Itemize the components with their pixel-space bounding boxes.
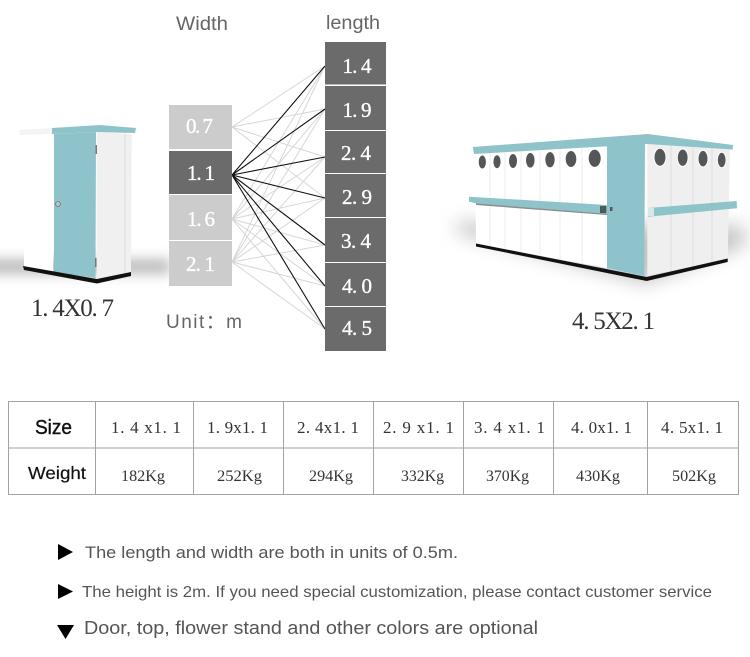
- note 3: Door, top, flower stand and other colors are optional: [84, 618, 538, 638]
- row: weight: 294Kg: [309, 468, 353, 485]
- row: weight: [28, 463, 716, 485]
- row: size: 3. 4 x1. 1: [474, 418, 545, 437]
- row: size: Size: [35, 417, 72, 439]
- small shed illustration: [0, 125, 170, 284]
- row: size: 1. 9x1. 1: [207, 418, 268, 437]
- length column: 1. 9: [342, 98, 372, 122]
- note 2: The height is 2m. If you need special customization, please contact customer service: [82, 584, 712, 601]
- unit note: Unit：m: [166, 312, 242, 333]
- front windows: [479, 150, 601, 168]
- size and weight table: [8, 402, 738, 494]
- row: weight: 370Kg: [486, 468, 529, 485]
- row: size: 2. 4x1. 1: [297, 418, 359, 437]
- width column: 1. 6: [187, 207, 215, 231]
- length column: 3. 4: [341, 229, 372, 253]
- heading: width: Width: [176, 14, 228, 35]
- small shed caption: 1. 4X0. 7: [31, 295, 114, 322]
- row: size: 1. 4 x1. 1: [111, 418, 181, 437]
- connector lines: inactive widths: [232, 66, 325, 329]
- row: weight: 502Kg: [672, 468, 716, 485]
- row: weight: 332Kg: [401, 468, 444, 485]
- row: size: 4. 0x1. 1: [571, 418, 632, 437]
- width column: [169, 105, 232, 286]
- row: weight: 430Kg: [576, 468, 620, 485]
- row: weight: 252Kg: [217, 468, 262, 485]
- length column: 2. 4: [341, 141, 372, 165]
- row: size: 2. 9 x1. 1: [383, 418, 454, 437]
- row: weight: Weight: [28, 463, 86, 483]
- length column: 1. 4: [342, 54, 372, 78]
- large shed caption: 4. 5X2. 1: [572, 308, 655, 335]
- row: weight: 182Kg: [121, 468, 165, 485]
- length column: 4. 0: [342, 274, 372, 298]
- connector lines: width 1.1: [232, 66, 325, 329]
- width column: 2. 1: [186, 252, 215, 276]
- side windows: [654, 148, 726, 168]
- note 1: The length and width are both in units of 0.5m.: [85, 543, 458, 562]
- width column: 1. 1: [187, 161, 215, 185]
- large shed illustration: [456, 134, 745, 284]
- row: size: [35, 417, 723, 439]
- row: size: 4. 5x1. 1: [661, 418, 723, 437]
- width column: 0. 7: [186, 114, 213, 138]
- length column: 2. 9: [342, 185, 372, 209]
- length column: [325, 42, 386, 351]
- length column: 4. 5: [342, 316, 372, 340]
- heading: length: length: [326, 13, 380, 34]
